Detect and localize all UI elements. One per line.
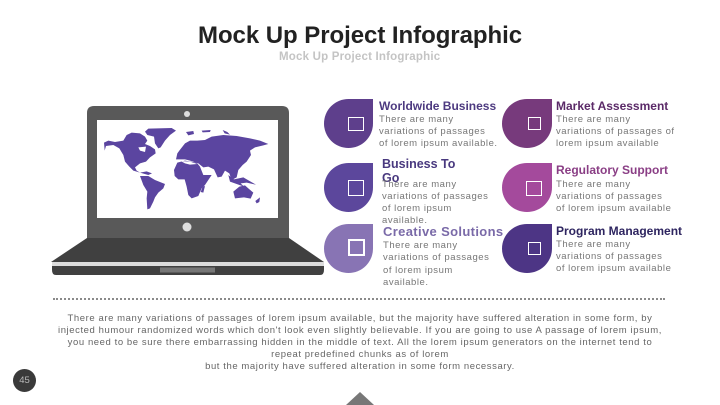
Eurasia — [176, 135, 268, 180]
body text: variations of passages of — [556, 126, 675, 137]
Africa — [174, 161, 212, 198]
body text — [379, 114, 498, 149]
body text — [556, 239, 671, 274]
body text: of lorem ipsum — [383, 264, 453, 276]
laptop button — [182, 222, 192, 232]
heading — [382, 157, 455, 185]
icon: petal with square — [324, 99, 373, 148]
laptop screen bezel — [87, 106, 289, 238]
panel: business to go — [324, 157, 488, 226]
icon: petal with square — [502, 163, 552, 212]
body text: There are many — [556, 239, 631, 250]
body text: There are many — [382, 179, 457, 190]
heading: Business To — [382, 157, 455, 171]
map holes — [138, 147, 146, 152]
body text: There are many — [383, 240, 458, 251]
body text: variations of passages — [379, 126, 485, 137]
laptop silver strip — [52, 262, 324, 266]
panel: worldwide business — [324, 99, 498, 149]
paragraph text: you need to be sure there embarrassing hidden in the middle of text. All the lorem ipsum generators on the internet tend to — [68, 337, 652, 348]
subtitle: Mock Up Project Infographic — [279, 51, 440, 63]
paragraph text: There are many variations of passages of lorem ipsum available, but the majority have suffered alteration in some form, by — [68, 313, 652, 324]
paragraph text: repeat predefined chunks as of lorem — [271, 349, 449, 360]
laptop trackpad notch — [160, 268, 215, 272]
body text: of lorem ipsum available — [556, 263, 671, 274]
body text: There are many — [379, 114, 454, 125]
panel: program management — [502, 224, 682, 274]
laptop camera — [184, 111, 190, 117]
laptop base — [51, 238, 324, 262]
panel: market assessment — [502, 99, 675, 149]
Australia — [233, 185, 253, 199]
body text: of lorem ipsum available. — [379, 138, 498, 149]
icon: petal with square — [502, 99, 552, 148]
body text: variations of passages — [556, 191, 662, 202]
body text: variations of passages — [556, 251, 662, 262]
body text — [383, 240, 489, 288]
paragraph text: but the majority have suffered alteration in some form necessary. — [205, 361, 515, 372]
heading: Worldwide Business — [379, 99, 496, 113]
laptop display — [97, 120, 278, 218]
body text: of lorem ipsum — [382, 203, 452, 214]
heading: Creative Solutions — [383, 224, 503, 239]
body text: available. — [382, 215, 428, 226]
paragraph text — [58, 313, 662, 372]
heading: Program Management — [556, 224, 682, 238]
heading: Go — [382, 171, 399, 185]
heading: Market Assessment — [556, 99, 668, 113]
panel: creative solutions — [324, 224, 503, 288]
world map — [104, 128, 268, 209]
body text: There are many — [556, 179, 631, 190]
body text — [382, 179, 488, 226]
laptop front edge — [52, 266, 324, 275]
body text: available. — [383, 277, 429, 288]
body text: of lorem ipsum available — [556, 203, 671, 214]
icon: bottom triangle — [346, 392, 374, 405]
body text: lorem ipsum available — [556, 138, 659, 149]
page number badge: 45 — [19, 375, 30, 386]
body text: variations of passages — [382, 191, 488, 202]
paragraph text: injected humour randomized words which don't look even slightly believable. If you are going to use A passage of lorem ipsum, — [58, 325, 662, 336]
panel: regulatory support — [502, 163, 671, 214]
body text: variations of passages — [383, 252, 489, 263]
icon: petal with square — [502, 224, 552, 273]
body text: There are many — [556, 114, 631, 125]
icon: petal with square — [324, 224, 373, 273]
page number badge — [13, 369, 36, 392]
icon: petal with square — [324, 163, 373, 212]
body text — [556, 114, 675, 149]
heading: Regulatory Support — [556, 163, 668, 177]
title: Mock Up Project Infographic — [198, 22, 522, 49]
body text — [556, 179, 671, 214]
